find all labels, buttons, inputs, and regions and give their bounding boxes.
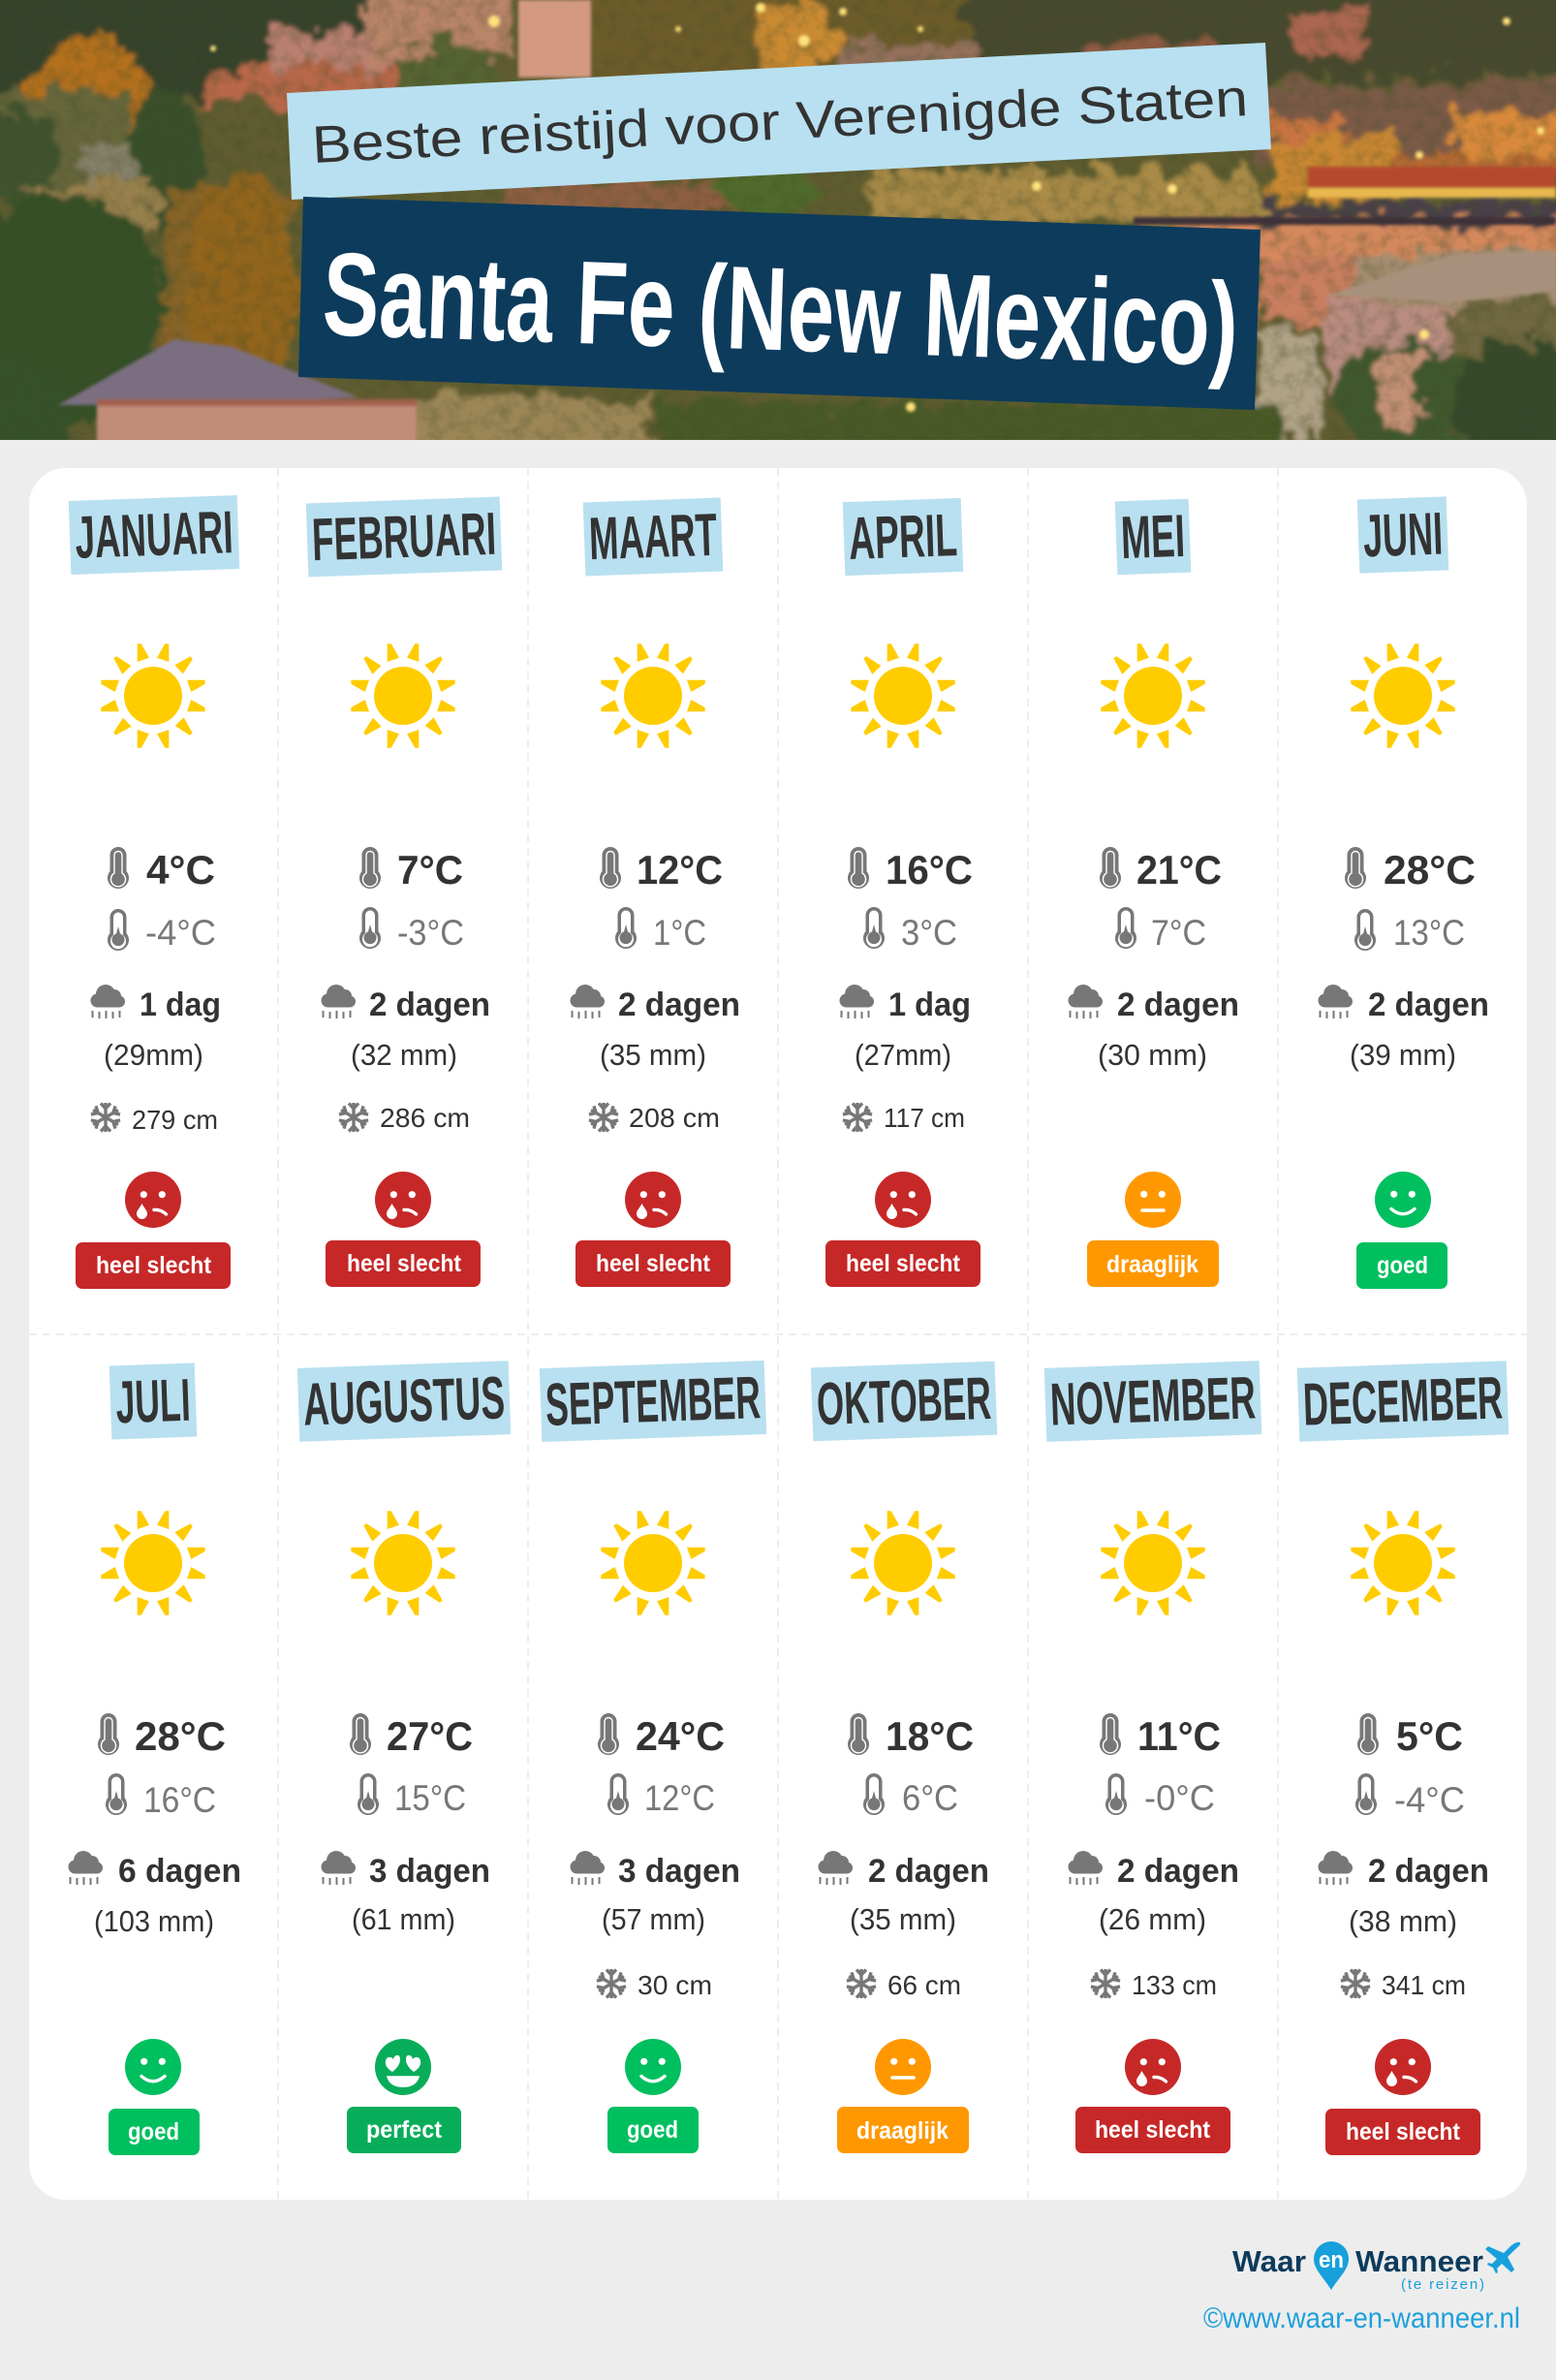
rating label bbox=[1087, 1240, 1219, 1287]
low temperature bbox=[1355, 1773, 1465, 1820]
icon: sun bbox=[851, 1511, 955, 1615]
rating face bbox=[1375, 1172, 1431, 1228]
rating label bbox=[576, 1240, 731, 1287]
panel: november bbox=[1044, 1361, 1261, 2153]
low temperature bbox=[1354, 909, 1465, 953]
month label bbox=[297, 1361, 511, 1442]
rain days: 2 dagen bbox=[868, 1853, 989, 1890]
snow depth: 286 cm bbox=[380, 1103, 470, 1133]
rain days: 2 dagen bbox=[1368, 1853, 1489, 1890]
rain days bbox=[1318, 1851, 1489, 1890]
low temperature: 12°C bbox=[644, 1778, 715, 1818]
rain amount: (30 mm) bbox=[1098, 1038, 1207, 1072]
month label: NOVEMBER bbox=[1049, 1364, 1257, 1439]
high temperature bbox=[1100, 1713, 1221, 1759]
panel: climate table card bbox=[29, 468, 1527, 2200]
rain days: 2 dagen bbox=[618, 986, 740, 1023]
high temperature bbox=[848, 847, 973, 892]
snow depth bbox=[589, 1103, 720, 1133]
rating label bbox=[1325, 2109, 1480, 2155]
rain amount: (26 mm) bbox=[1099, 1902, 1206, 1936]
rating label bbox=[837, 2107, 969, 2153]
rating label: heel slecht bbox=[846, 1250, 961, 1277]
high temperature: 12°C bbox=[637, 847, 723, 892]
month label: MEI bbox=[1120, 503, 1186, 572]
rating face bbox=[1375, 2039, 1431, 2095]
rain amount: (35 mm) bbox=[600, 1038, 706, 1072]
low temperature bbox=[607, 1773, 715, 1818]
rain days bbox=[570, 985, 740, 1023]
high temperature bbox=[1100, 847, 1222, 892]
high temperature: 21°C bbox=[1136, 847, 1222, 892]
month label bbox=[1357, 496, 1448, 574]
rating face bbox=[375, 1172, 431, 1228]
rating face bbox=[875, 1172, 931, 1228]
rating label bbox=[1075, 2107, 1230, 2153]
rain days: 2 dagen bbox=[1117, 986, 1239, 1023]
rating face bbox=[1125, 1172, 1181, 1228]
low temperature bbox=[1115, 907, 1206, 953]
rain days bbox=[1068, 985, 1239, 1023]
high temperature bbox=[600, 847, 723, 892]
high temperature: 11°C bbox=[1137, 1713, 1221, 1759]
rain days: 1 dag bbox=[888, 986, 971, 1023]
low temperature: -3°C bbox=[397, 913, 464, 953]
high temperature: 24°C bbox=[636, 1713, 725, 1759]
icon: sun bbox=[1351, 1511, 1455, 1615]
rating label: heel slecht bbox=[96, 1252, 212, 1279]
snow depth: 208 cm bbox=[629, 1103, 720, 1133]
rating face bbox=[625, 2039, 681, 2095]
low temperature bbox=[359, 907, 464, 953]
rain amount: (103 mm) bbox=[94, 1904, 214, 1938]
rating label: heel slecht bbox=[347, 1250, 462, 1277]
hero photo: Santa Fe skyline at dusk bbox=[0, 0, 1556, 475]
icon: sun bbox=[1351, 643, 1455, 748]
rain days: 2 dagen bbox=[1368, 986, 1489, 1023]
icon: sun bbox=[851, 643, 955, 748]
low temperature: 7°C bbox=[1151, 913, 1206, 953]
high temperature: 28°C bbox=[135, 1713, 226, 1759]
rating label: heel slecht bbox=[1346, 2118, 1461, 2145]
high temperature bbox=[598, 1713, 725, 1759]
high temperature: 28°C bbox=[1384, 847, 1476, 892]
snow depth: 279 cm bbox=[132, 1105, 218, 1135]
panel: juli bbox=[68, 1362, 241, 2155]
panel: augustus bbox=[297, 1361, 511, 2153]
month label: MAART bbox=[588, 502, 718, 573]
month label bbox=[1044, 1361, 1261, 1442]
low temperature bbox=[106, 1773, 216, 1820]
icon: sun bbox=[1101, 1511, 1205, 1615]
low temperature: -4°C bbox=[145, 913, 216, 953]
rain days: 2 dagen bbox=[1117, 1853, 1239, 1890]
rating label: heel slecht bbox=[596, 1250, 711, 1277]
rain amount: (27mm) bbox=[855, 1038, 951, 1072]
rain amount: (39 mm) bbox=[1350, 1038, 1456, 1072]
high temperature bbox=[848, 1713, 974, 1759]
month label: JANUARI bbox=[74, 499, 234, 572]
month label bbox=[540, 1361, 766, 1442]
panel: december bbox=[1297, 1361, 1509, 2155]
rating label: draaglijk bbox=[856, 2117, 949, 2145]
high temperature bbox=[1357, 1713, 1463, 1759]
rain amount: (57 mm) bbox=[602, 1902, 705, 1936]
icon: sun bbox=[351, 643, 455, 748]
snow depth: 30 cm bbox=[638, 1970, 712, 2000]
rain amount: (38 mm) bbox=[1349, 1904, 1457, 1938]
rain days bbox=[1318, 985, 1489, 1023]
snow depth bbox=[1091, 1969, 1217, 2000]
logo: Waar en Wanneer bbox=[1232, 2241, 1520, 2293]
rain days bbox=[68, 1851, 241, 1890]
rating face bbox=[125, 1172, 181, 1228]
icon: sun bbox=[101, 1511, 205, 1615]
low temperature bbox=[108, 909, 216, 953]
rain amount: (32 mm) bbox=[351, 1038, 457, 1072]
month label: AUGUSTUS bbox=[302, 1364, 506, 1439]
rating label bbox=[326, 1240, 481, 1287]
low temperature: 6°C bbox=[902, 1778, 958, 1818]
snow depth: 341 cm bbox=[1382, 1970, 1466, 2000]
high temperature: 16°C bbox=[886, 847, 973, 892]
low temperature: 3°C bbox=[901, 913, 957, 953]
low temperature bbox=[615, 907, 706, 953]
low temperature bbox=[1105, 1773, 1215, 1818]
rating label bbox=[347, 2107, 461, 2153]
rating label: heel slecht bbox=[1095, 2116, 1211, 2144]
panel: mei bbox=[1068, 499, 1239, 1287]
high temperature bbox=[350, 1713, 473, 1759]
rating label bbox=[1356, 1242, 1447, 1289]
low temperature bbox=[863, 907, 957, 953]
rating face bbox=[125, 2039, 181, 2095]
low temperature bbox=[863, 1773, 958, 1818]
high temperature: 4°C bbox=[146, 847, 215, 892]
snow depth bbox=[1341, 1969, 1466, 2000]
icon: sun bbox=[1101, 643, 1205, 748]
month label bbox=[109, 1362, 197, 1440]
icon: sun bbox=[601, 643, 705, 748]
icon: sun bbox=[101, 643, 205, 748]
rain days bbox=[570, 1851, 740, 1890]
month label: JULI bbox=[114, 1367, 192, 1436]
rain days bbox=[818, 1851, 989, 1890]
subtitle banner bbox=[287, 43, 1271, 200]
high temperature bbox=[359, 847, 463, 892]
month label: APRIL bbox=[848, 502, 958, 573]
panel: april bbox=[825, 498, 980, 1287]
rain days bbox=[322, 1851, 490, 1890]
panel: oktober bbox=[811, 1362, 997, 2153]
panel: januari bbox=[69, 495, 239, 1289]
snow depth: 117 cm bbox=[884, 1103, 965, 1133]
low temperature: 1°C bbox=[653, 913, 706, 953]
low temperature bbox=[358, 1773, 466, 1818]
icon: sun bbox=[351, 1511, 455, 1615]
rain days: 3 dagen bbox=[369, 1853, 490, 1890]
low temperature: -0°C bbox=[1144, 1778, 1215, 1818]
subtitle banner: Beste reistijd voor Verenigde Staten bbox=[311, 69, 1249, 174]
website credit: ©www.waar-en-wanneer.nl bbox=[1203, 2302, 1520, 2334]
high temperature: 27°C bbox=[387, 1713, 473, 1759]
month label: FEBRUARI bbox=[311, 501, 497, 574]
high temperature: 5°C bbox=[1396, 1713, 1463, 1759]
high temperature bbox=[108, 847, 215, 892]
rating label: draaglijk bbox=[1106, 1251, 1198, 1278]
month label: JUNI bbox=[1362, 501, 1444, 570]
rain days: 1 dag bbox=[140, 986, 221, 1023]
rain amount: (61 mm) bbox=[352, 1902, 455, 1936]
panel: juni bbox=[1318, 496, 1489, 1289]
low temperature: 13°C bbox=[1393, 913, 1465, 953]
month label bbox=[69, 495, 239, 575]
rating label: goed bbox=[627, 2116, 678, 2144]
rain days bbox=[322, 985, 490, 1023]
rating label: goed bbox=[128, 2118, 179, 2145]
icon: map pin: en bbox=[1319, 2247, 1344, 2273]
panel: maart bbox=[570, 498, 740, 1287]
rain amount: (29mm) bbox=[104, 1038, 203, 1072]
rain days: 3 dagen bbox=[618, 1853, 740, 1890]
rating label: goed bbox=[1377, 1252, 1428, 1279]
icon: airplane bbox=[1485, 2242, 1520, 2273]
snow depth bbox=[91, 1103, 218, 1135]
rating face bbox=[375, 2039, 431, 2095]
month label bbox=[843, 498, 963, 576]
snow depth: 66 cm bbox=[887, 1970, 961, 2000]
rain amount: (35 mm) bbox=[850, 1902, 956, 1936]
title banner bbox=[298, 197, 1260, 410]
icon: map pin bbox=[1314, 2241, 1349, 2290]
rating face bbox=[625, 1172, 681, 1228]
high temperature: 7°C bbox=[397, 847, 463, 892]
rating face bbox=[1125, 2039, 1181, 2095]
rain days bbox=[91, 985, 221, 1023]
snow depth bbox=[847, 1969, 961, 2000]
rating label bbox=[607, 2107, 699, 2153]
logo: Waar en Wanneer: Waar bbox=[1232, 2244, 1306, 2278]
rain days: 6 dagen bbox=[118, 1853, 241, 1890]
rating label bbox=[76, 1242, 231, 1289]
low temperature: -4°C bbox=[1394, 1780, 1465, 1820]
month label bbox=[811, 1362, 997, 1441]
rating label: perfect bbox=[366, 2116, 443, 2144]
month label: SEPTEMBER bbox=[545, 1364, 762, 1439]
rain days: 2 dagen bbox=[369, 986, 490, 1023]
snow depth bbox=[597, 1969, 712, 2000]
logo: Waar en Wanneer: (te reizen) bbox=[1401, 2276, 1484, 2293]
snow depth bbox=[339, 1103, 470, 1133]
snow depth bbox=[843, 1103, 965, 1133]
high temperature: 18°C bbox=[886, 1713, 974, 1759]
rating label bbox=[825, 1240, 980, 1287]
rating face bbox=[875, 2039, 931, 2095]
panel: februari bbox=[306, 497, 502, 1287]
month label: OKTOBER bbox=[816, 1365, 992, 1438]
month label bbox=[583, 498, 723, 576]
logo: Waar en Wanneer: Wanneer bbox=[1355, 2244, 1483, 2278]
snow depth: 133 cm bbox=[1132, 1970, 1217, 2000]
rain days bbox=[1068, 1851, 1239, 1890]
low temperature: 16°C bbox=[143, 1780, 216, 1820]
panel: september bbox=[540, 1361, 766, 2153]
rain days bbox=[839, 985, 971, 1023]
high temperature bbox=[1345, 847, 1476, 892]
icon: sun bbox=[601, 1511, 705, 1615]
rating label bbox=[109, 2109, 200, 2155]
low temperature: 15°C bbox=[394, 1778, 466, 1818]
month label bbox=[306, 497, 502, 577]
month label bbox=[1115, 499, 1191, 575]
